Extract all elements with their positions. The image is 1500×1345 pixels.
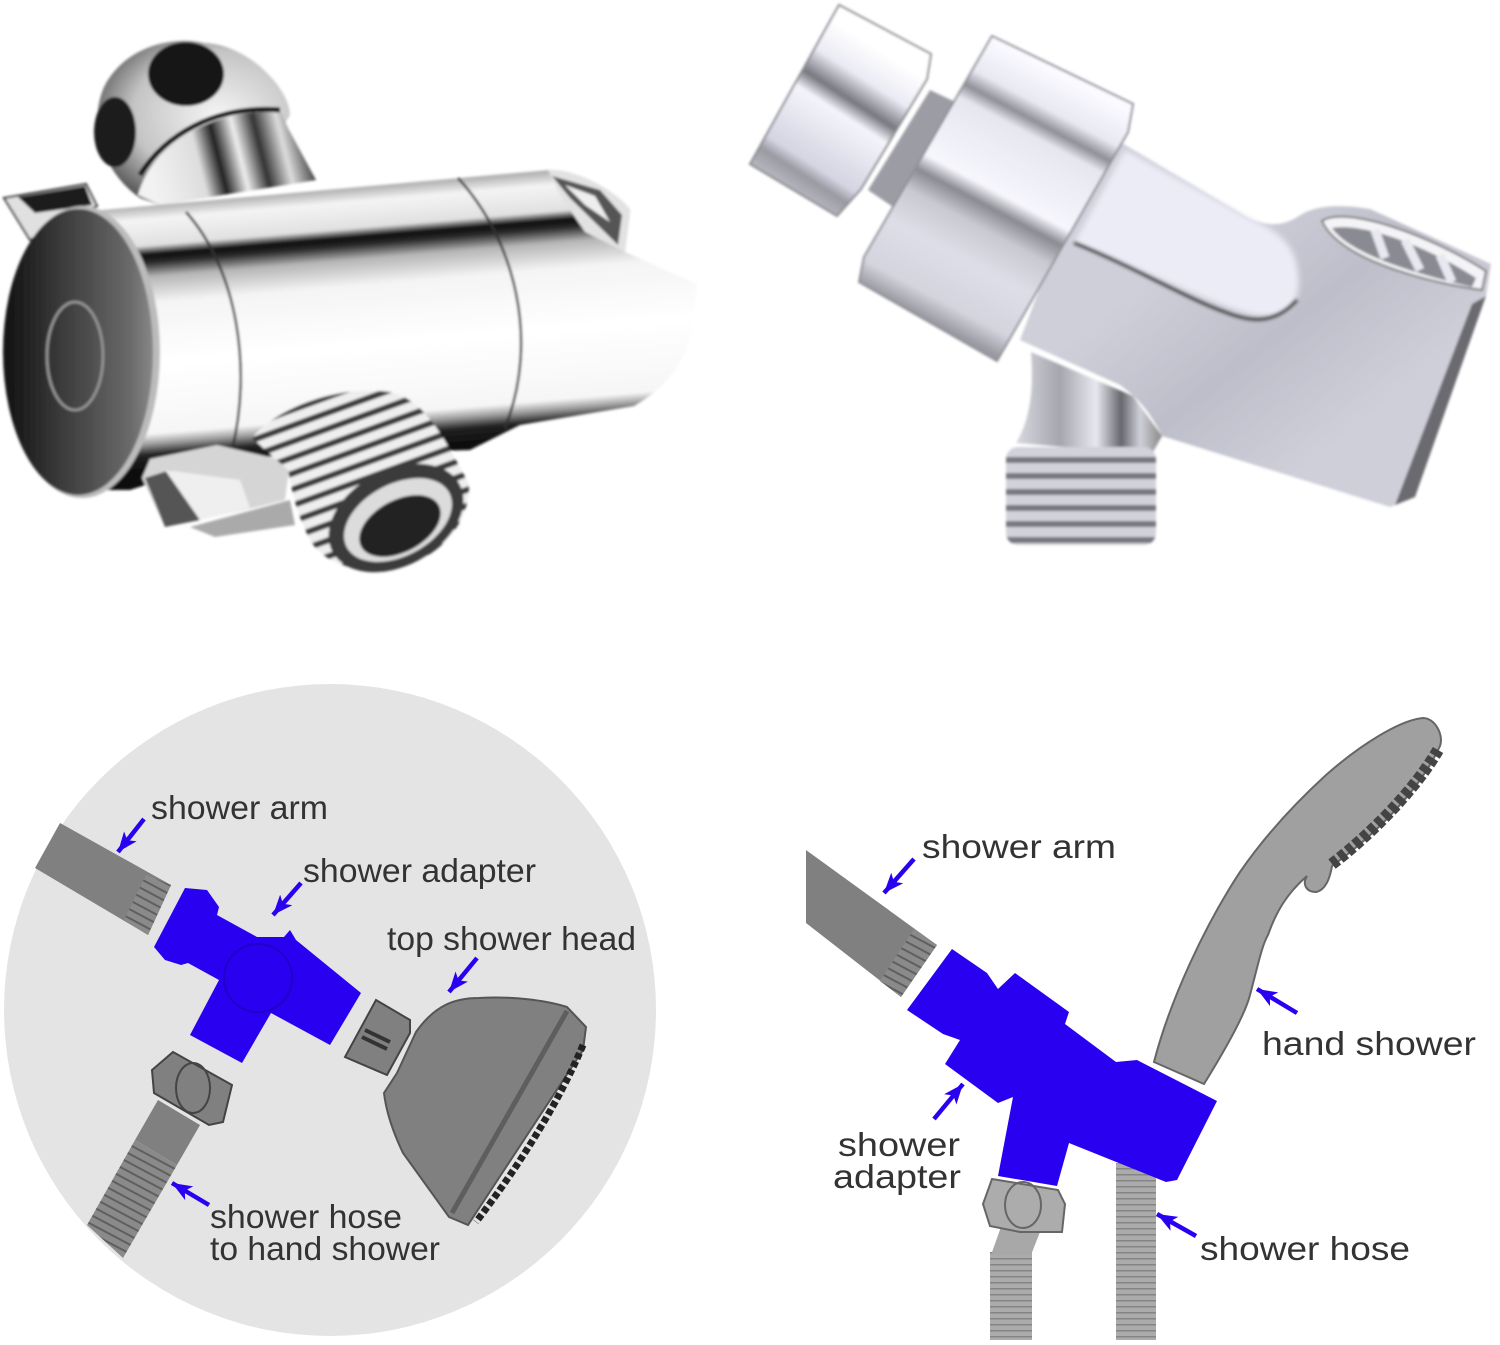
label: hand shower: hand shower [1262,1025,1476,1062]
blue adapter [154,888,361,1063]
label: shower arm: shower arm [922,828,1116,865]
label: shower adapter: shower adapter [303,852,536,889]
label: shower hose: shower hose [1200,1230,1410,1267]
left clip tab [4,184,97,240]
label: shower hose to hand shower: shower hose [210,1198,402,1235]
label: shower arm: shower arm [151,789,328,826]
arrow: shower hose [1157,1214,1196,1236]
label: to hand shower: to hand shower [210,1230,440,1267]
right edge reflection [1395,296,1486,505]
top swivel ball connector [94,41,316,205]
end cap [4,206,160,498]
seam lines [186,178,521,450]
nut and hose [87,1052,232,1258]
bottom clip [142,445,295,537]
right cradle [548,170,630,252]
top shower head [384,997,586,1225]
neck between nut and collar [868,90,968,215]
hand shower [1154,718,1441,1084]
threaded outlet [252,391,482,594]
diagram: hand shower [806,718,1476,1340]
swivel nut [750,5,931,216]
outlet neck [1016,352,1162,454]
coupling [345,1000,410,1075]
diagram: circular shower arm and top shower head [4,684,656,1336]
label: shower: shower [838,1126,960,1163]
arrow: shower hose [172,1183,209,1205]
collar [859,36,1133,361]
photo: shower adapter with hand shower cradle [750,5,1491,545]
body [1020,130,1491,507]
label: top shower head: top shower head [387,920,636,957]
grey circle background [4,684,656,1336]
shower arm pipe [806,850,937,997]
arrow: top shower head [449,958,477,992]
nut [983,1179,1065,1232]
blue adapter [907,949,1217,1186]
cradle opening [1322,217,1486,290]
arrow: shower arm [118,819,144,852]
arrow: shower adapter [273,883,301,915]
threads [1006,447,1156,545]
shower arm pipe [35,823,171,935]
label: adapter: adapter [833,1158,961,1195]
hoses [990,1163,1156,1340]
main cylinder [70,170,697,490]
upper tube highlight [1074,150,1299,316]
arrow: shower adapter [934,1084,963,1119]
arrow: hand shower [1257,989,1297,1013]
photo: three-way shower adapter, round body [3,41,697,594]
arrow: shower arm [884,859,914,893]
